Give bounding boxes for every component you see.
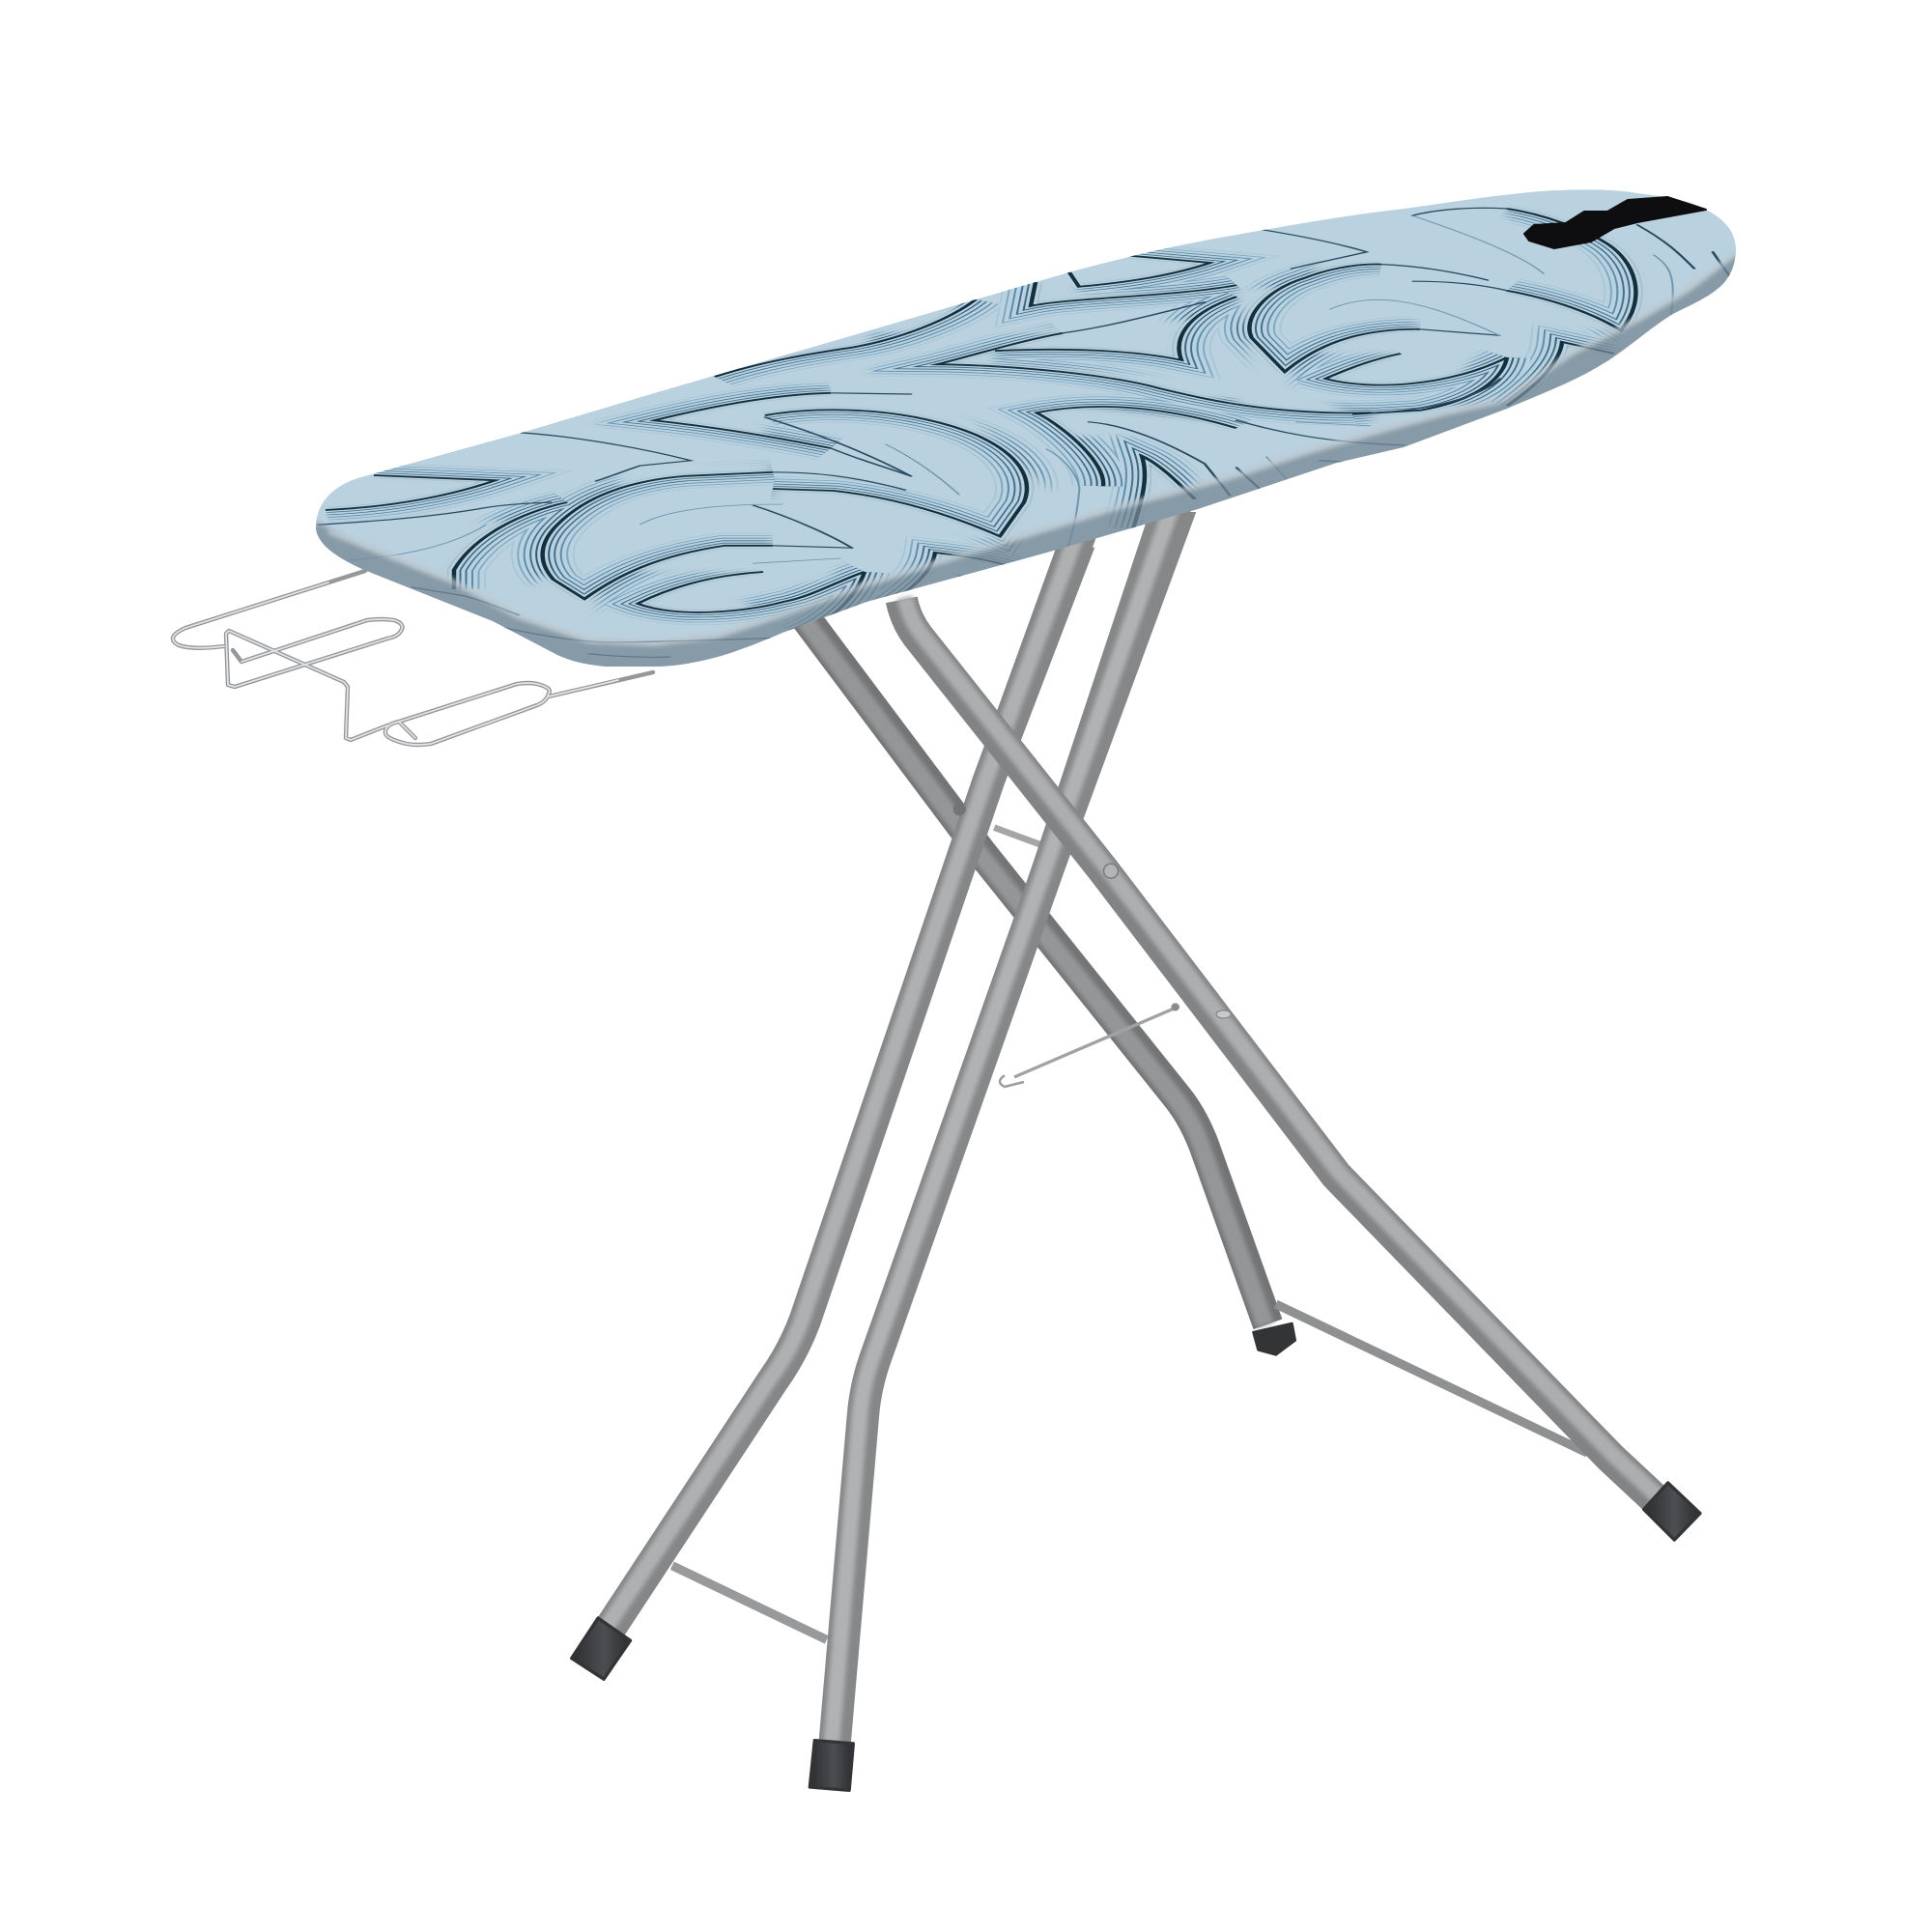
left foot: [572, 1618, 630, 1679]
hanging strap: [1524, 197, 1706, 248]
back-right foot: [1644, 1483, 1700, 1540]
back front-crossing leg: [901, 597, 1673, 1514]
top hinge rod: [994, 828, 1046, 847]
leg assembly: [572, 496, 1700, 1790]
front cross bar: [672, 1566, 827, 1639]
dark pattern contours: [326, 209, 1635, 634]
rivets: [953, 803, 1231, 1018]
left front leg: [596, 496, 1094, 1644]
thin pattern lines: [319, 208, 1731, 657]
wire iron rest: [173, 571, 653, 745]
rear foot: [1253, 1323, 1295, 1354]
swirl pattern stripes: [319, 208, 1731, 657]
side band shading: [290, 252, 1758, 676]
right front leg: [832, 496, 1196, 1743]
faint wisps: [348, 215, 1673, 563]
board surface: [316, 189, 1736, 667]
spring wire: [1000, 1007, 1179, 1087]
rear leg: [799, 611, 1267, 1325]
side edge highlight: [328, 253, 1736, 643]
right foot: [810, 1741, 853, 1790]
rear cross bar: [1276, 1304, 1587, 1453]
ironing board cover: [290, 189, 1758, 676]
illustration: ironing board: [170, 189, 1736, 1792]
